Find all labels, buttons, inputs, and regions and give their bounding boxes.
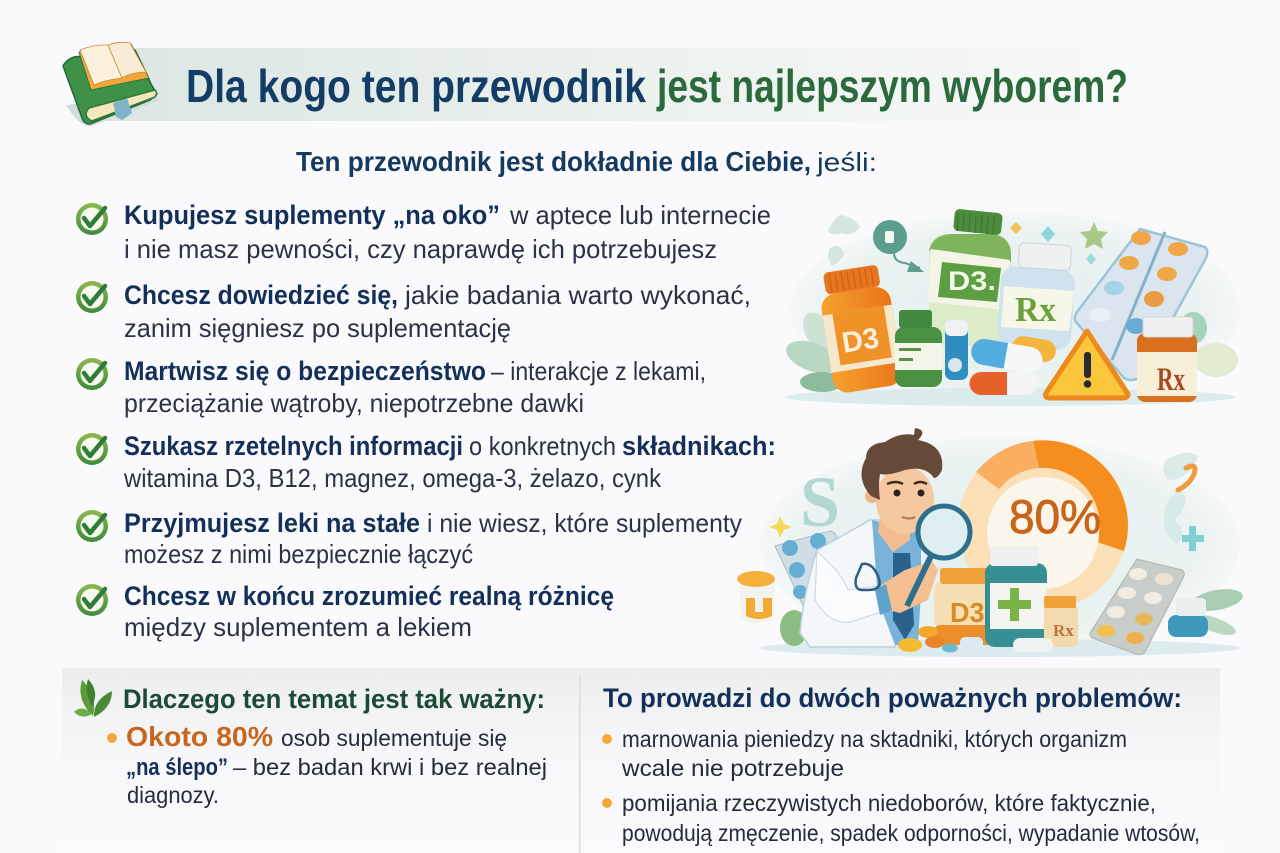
item 3 text: Martwisz się o bezpieczeństwo [124,356,486,386]
small Rx bottle [1137,317,1197,402]
D3 jar [934,568,999,645]
icon: check [76,433,108,465]
illustration: supplement bottles [782,209,1240,408]
banner strip [85,48,1218,121]
left body text: „na ślepo” [126,754,228,781]
bullet 1 [602,726,1127,781]
capsules [969,334,1058,395]
sparkles [1010,222,1108,265]
hair [862,428,942,500]
icon: check [76,358,108,390]
lab coat [800,520,905,647]
large green bottle: D3. [948,266,996,296]
bullet 1: marnowania pieniedzy na sktadniki, których organizm [622,726,1127,752]
title banner [63,42,1218,126]
left column: why important [74,679,547,808]
title text: jest najlepszym wyborem? [656,60,1128,112]
title text [186,60,1128,112]
stethoscope [856,564,880,590]
item 5 text [124,508,742,569]
subheading: jeśli: [816,147,877,177]
item 2 text: zanim sięgniesz po suplementację [124,313,511,343]
panel background [62,668,1220,853]
bullet 2 [602,790,1200,846]
coins and pills [898,626,1053,652]
item 1 text [124,200,771,264]
item 2 text: Chcesz dowiedzieć się, [124,280,398,310]
item 3 text: przeciążanie wątroby, niepotrzebne dawki [124,388,584,418]
item 4 text: o konkretnych [469,431,616,461]
small green bottle [895,310,942,387]
item 1 text: w aptece lub internecie [509,200,771,230]
right column: two problems [602,683,1200,846]
leaves and small blue bottle [1168,586,1244,639]
blister right [1090,559,1184,654]
small Rx bottle: Rx [1157,362,1185,398]
80% label: 80% [1009,490,1101,543]
right heading: To prowadzi do dwóch poważnych problemów: [603,683,1182,713]
jar left [737,571,775,623]
shirt and tie [872,520,921,645]
decorative S and plus [769,453,1204,551]
item 3 text [124,356,706,418]
item 5 text: i nie wiesz, które suplementy [427,508,742,538]
D3 jar: D3. [950,597,992,628]
ground shadow [760,639,1240,657]
left body text [126,721,547,808]
item 2 [76,280,751,343]
teal plus bottle [985,546,1047,647]
bottom panel [62,668,1220,853]
orange D3 bottle [816,263,904,395]
item 4 [76,431,776,493]
illustration: doctor with magnifier and 80% chart [737,428,1244,657]
icon: check [76,281,108,313]
item 1 text: Kupujesz suplementy „na oko” [124,200,500,230]
doctor [800,428,970,647]
bullet dot [107,733,117,743]
blue vial [945,320,968,380]
cuff [875,584,892,615]
item 2 text [124,280,751,343]
icon: check [76,584,108,616]
item 5 [76,508,742,569]
left body text: Okoto 80% [126,721,273,752]
item 6 text: Chcesz w końcu zrozumieć realną różnicę [124,581,614,611]
item 1 text: i nie masz pewności, czy naprawdę ich potrzebujesz [124,234,717,264]
bullet 1: wcale nie potrzebuje [621,755,844,781]
magnifier [918,506,970,558]
ground shadow [785,388,1235,406]
icon: teal circle with arrow [873,220,924,272]
panel divider [579,676,580,853]
item 3 [76,356,706,418]
leaves [782,215,1238,392]
Rx bottle: Rx [1015,290,1056,329]
left body text: osob suplementuje się [281,725,507,751]
item 4 text: witamina D3, B12, magnez, omega-3, żelazo, cynk [123,463,662,493]
checklist [76,200,776,642]
item 5 text: możesz z nimi bezpiecznie łączyć [124,539,473,569]
title text: Dla kogo ten przewodnik [186,60,646,112]
pale backdrop [760,437,1240,653]
hand [881,561,938,613]
item 1 [76,200,771,264]
item 4 text: składnikach: [622,431,776,461]
item 6 text [124,581,614,642]
item 5 text: Przyjmujesz leki na stałe [124,508,420,538]
item 6 [76,581,614,642]
leaf behind doctor [780,610,808,646]
Rx mini bottle: Rx [1053,621,1074,640]
pale backdrop [790,212,1240,408]
bullet 2: pomijania rzeczywistych niedoborów, które faktycznie, [622,790,1156,816]
icon: warning triangle [1046,331,1128,398]
item 6 text: między suplementem a lekiem [124,612,472,642]
icon: green book with open book [63,42,160,126]
blister left [775,531,850,625]
item 4 text [123,431,776,493]
donut chart 80% [958,440,1128,610]
sleeve [815,552,888,622]
bullet 2: powodują zmęczenie, spadek odporności, wypadanie wtosów, [622,820,1200,846]
neck and face [878,515,910,552]
Rx bottle [996,242,1076,350]
item 3 text: – interakcje z lekami, [491,356,706,386]
decorative S and plus: S [800,462,840,542]
Rx mini bottle [1044,596,1078,647]
left body text: diagnozy. [127,782,219,808]
orange D3 bottle: D3 [840,322,881,360]
item 2 text: jakie badania warto wykonać, [404,280,751,310]
blister pack [1075,229,1207,380]
left heading: Dlaczego ten temat jest tak ważny: [123,684,545,714]
item 4 text: Szukasz rzetelnych informacji [124,431,463,461]
icon: check [76,203,108,235]
subheading: Ten przewodnik jest dokładnie dla Ciebie, [296,146,811,177]
large green bottle [928,209,1011,346]
icon: check [76,510,108,542]
left body text: – bez badan krwi i bez realnej [233,754,547,780]
icon: leaf sprig [74,679,112,717]
